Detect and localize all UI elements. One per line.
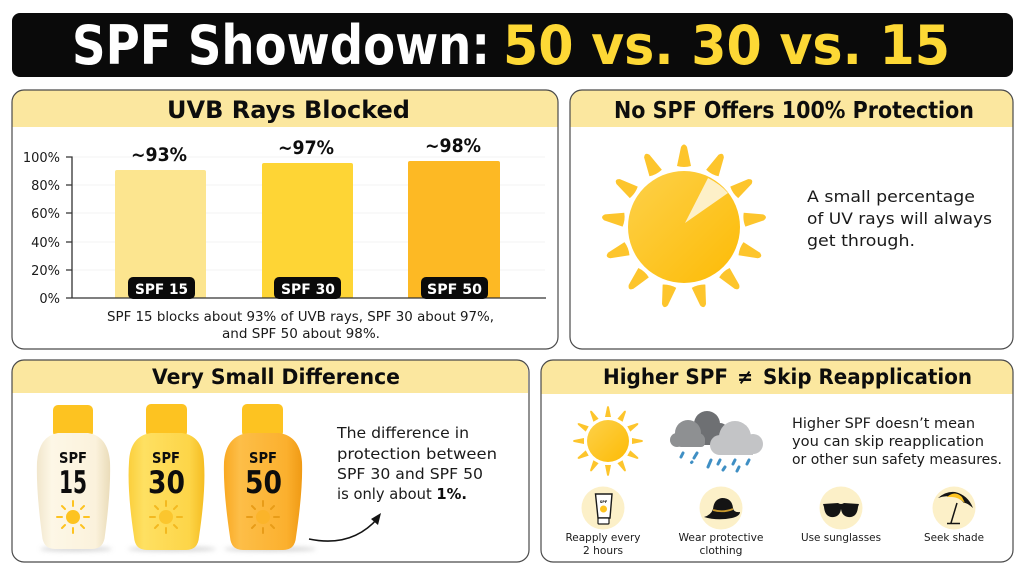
- heading: higher SPF: Higher SPF: [603, 365, 728, 389]
- bar chart: 100%: [23, 151, 60, 166]
- text: small percentage: [807, 187, 992, 250]
- panel: very small difference: [12, 360, 529, 562]
- bar chart: ~98%: [425, 135, 481, 157]
- icon: sun: [573, 406, 643, 476]
- bar chart: ~97%: [278, 137, 334, 159]
- text: reapplication message: Higher SPF doesn’t mean: [792, 416, 975, 432]
- icon: SPF 30 bottle: SPF: [152, 449, 180, 467]
- bar chart: [23, 135, 546, 307]
- heading: no SPF offers 100%: No SPF Offers 100% Protection: [614, 98, 974, 124]
- item: shade: [924, 486, 984, 544]
- bar chart: SPF 30: [281, 282, 335, 298]
- heading: very small difference: Very Small Difference: [152, 365, 400, 389]
- item: shade: Seek shade: [924, 531, 984, 544]
- text: reapplication message: or other sun safety measures.: [792, 452, 1002, 468]
- arrow: [309, 513, 381, 541]
- caption: UVB percentages: SPF 15 blocks about 93% of UVB rays, SPF 30 about 97%,: [107, 310, 494, 325]
- bottle shadows: [40, 546, 316, 552]
- heading: higher SPF: [603, 365, 972, 389]
- icon: SPF 15 bottle: 15: [59, 465, 87, 501]
- text: reapplication message: you can skip reapplication: [792, 434, 984, 450]
- text: difference explanation: SPF 30 and SPF 50: [337, 465, 483, 483]
- item: reapply: SPF: [600, 500, 608, 504]
- title banner: [12, 13, 1013, 77]
- caption: UVB percentages: [107, 310, 494, 342]
- item: protective clothing: Wear protective: [678, 531, 764, 544]
- icon: SPF 50 bottle: 50: [245, 465, 282, 501]
- item: reapply: [566, 486, 641, 557]
- heading: higher SPF: ≠: [737, 365, 753, 389]
- item: sunglasses: Use sunglasses: [801, 531, 881, 544]
- bar chart: 60%: [31, 207, 60, 222]
- text: difference explanation: is only about 1%.: [337, 485, 467, 503]
- bar chart: 40%: [31, 236, 60, 251]
- item: sunglasses: [801, 486, 881, 544]
- bar chart: 0%: [39, 292, 60, 307]
- title banner: 50 vs. 30 vs. 15: [503, 14, 950, 77]
- icon: SPF 50 bottle: SPF: [249, 449, 277, 467]
- bar chart: 80%: [31, 179, 60, 194]
- icon: SPF 30 bottle: [129, 404, 204, 550]
- text: difference explanation: The difference in: [336, 424, 469, 442]
- title banner: SPF Showdown:: [72, 14, 490, 77]
- icon: SPF 30 bottle: 30: [148, 465, 185, 501]
- icon: SPF 15 bottle: SPF: [59, 449, 87, 467]
- caption: UVB percentages: and SPF 50 about 98%.: [222, 327, 380, 342]
- text: difference explanation: [336, 424, 497, 503]
- icon: sun with unblocked wedge: [601, 144, 767, 309]
- panel: UVB rays blocked: [12, 90, 558, 349]
- heading: higher SPF: Skip Reapplication: [763, 365, 972, 389]
- bar chart: ~93%: [131, 144, 187, 166]
- text: reapplication message: [792, 416, 1002, 468]
- bar chart: SPF 15: [135, 282, 188, 298]
- panel: no SPF offers 100% protection: [570, 90, 1013, 349]
- item: reapply: 2 hours: [583, 544, 623, 557]
- heading: UVB rays blocked: UVB Rays Blocked: [167, 96, 410, 124]
- bar chart: 20%: [31, 264, 60, 279]
- item: protective clothing: clothing: [700, 544, 742, 557]
- item: protective clothing: [678, 486, 764, 557]
- panel: higher SPF does not mean skip reapplication: [541, 360, 1013, 562]
- icon: SPF 50 bottle: [224, 404, 302, 550]
- item: reapply: Reapply every: [566, 531, 641, 544]
- text: small percentage: A small percentage: [807, 187, 975, 206]
- bar chart: SPF 50: [427, 282, 482, 298]
- text: difference explanation: protection between: [337, 445, 497, 463]
- text: small percentage: of UV rays will always: [807, 209, 992, 228]
- text: small percentage: get through.: [807, 231, 915, 250]
- icon: rain clouds: [670, 411, 763, 471]
- icon: SPF 15 bottle: [37, 405, 110, 549]
